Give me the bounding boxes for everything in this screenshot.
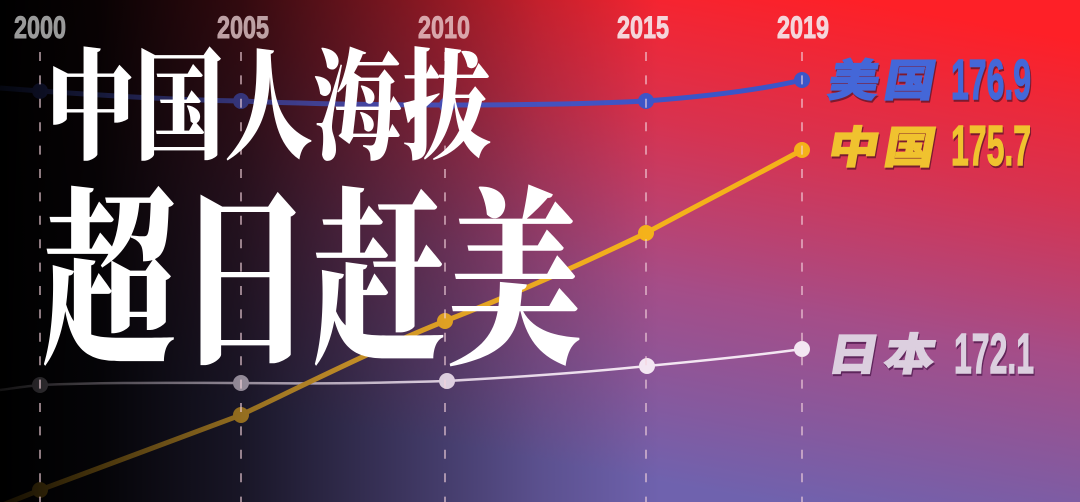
label: China 175.7: 国	[880, 124, 940, 173]
year 2019: 2019	[777, 10, 829, 45]
label: China 175.7	[824, 113, 1031, 177]
year 2000: 2000	[14, 10, 66, 45]
label: United States 176.9: 国	[880, 57, 940, 106]
label: Japan 172.1: 日	[824, 331, 884, 380]
label: Japan 172.1: 172.1	[954, 321, 1034, 385]
year gridlines	[40, 52, 802, 502]
label: United States 176.9: 176.9	[951, 47, 1031, 111]
label: Japan 172.1	[824, 321, 1034, 385]
year axis labels	[14, 10, 829, 45]
label: China 175.7: 中	[824, 124, 884, 173]
label: United States 176.9: 美	[824, 57, 884, 106]
title	[42, 42, 582, 390]
line series: Japan	[0, 341, 810, 393]
label: United States 176.9	[824, 47, 1031, 111]
year 2010: 2010	[418, 10, 470, 45]
year 2015: 2015	[617, 10, 669, 45]
title line 2: 超日赶美	[42, 178, 582, 390]
label: China 175.7: 175.7	[951, 113, 1031, 177]
line series: United States	[0, 72, 810, 113]
line series: China	[0, 142, 810, 502]
title line 1: 中国人海拔	[46, 42, 491, 175]
label: Japan 172.1: 本	[880, 331, 940, 380]
line chart series	[0, 72, 810, 502]
year 2005: 2005	[217, 10, 269, 45]
